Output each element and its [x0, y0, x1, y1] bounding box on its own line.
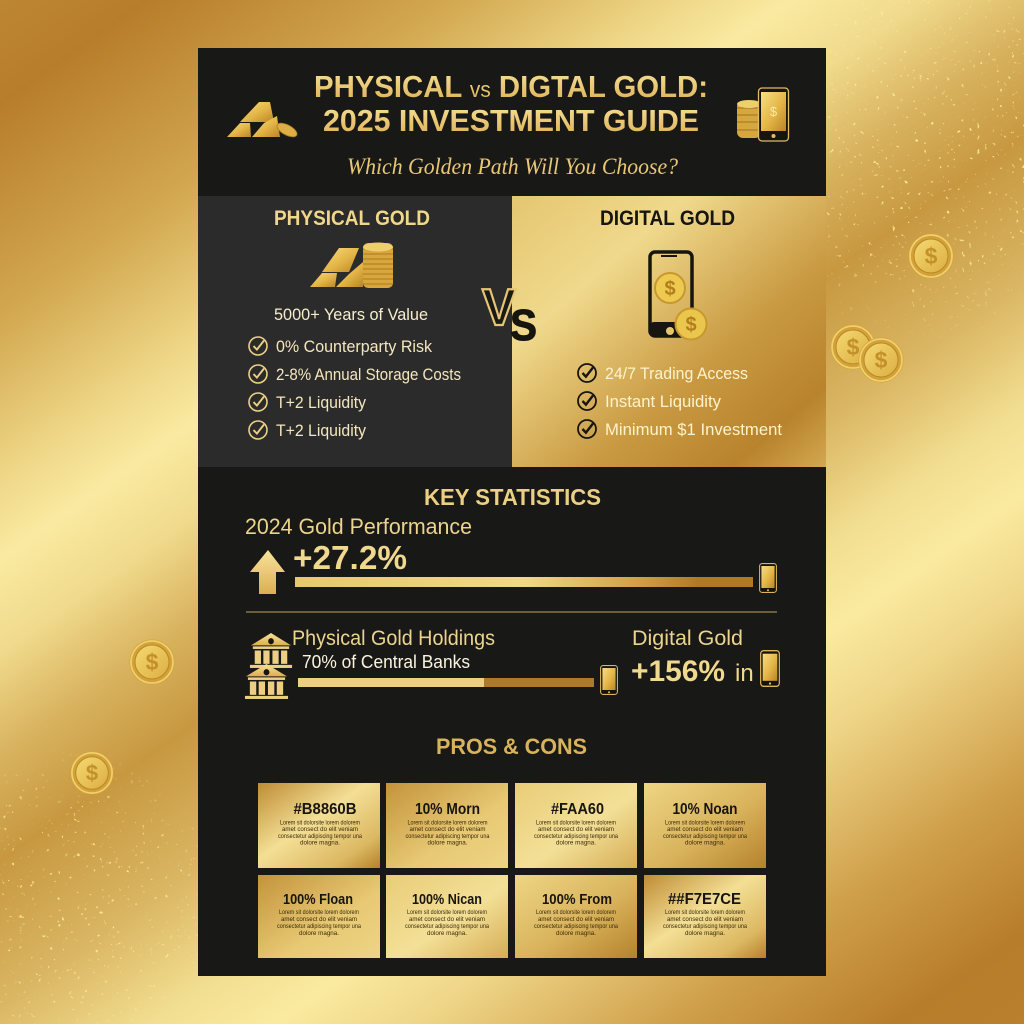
- check item 1: 0% Counterparty Risk: [276, 337, 432, 356]
- check item 1: 24/7 Trading Access: [605, 364, 748, 383]
- floating coin left upper: [130, 640, 174, 684]
- card 4: [644, 783, 766, 868]
- label: digital gold: Digital Gold: [632, 627, 743, 650]
- value: +27.2%: +27.2%: [293, 539, 407, 576]
- title block: [314, 69, 708, 179]
- holdings bar: [298, 678, 594, 687]
- card 6: Lorem sit dolorsite lorem dolorem: [407, 910, 487, 916]
- card 4: Lorem sit dolorsite lorem dolorem: [665, 820, 745, 826]
- heading: physical gold: PHYSICAL GOLD: [274, 207, 430, 230]
- gold dust top right: [826, 0, 1024, 350]
- card 3: [515, 783, 637, 868]
- card 7: consectetur adipiscing tempor una: [534, 924, 619, 930]
- value: +156%: +156%: [631, 655, 725, 688]
- gold dust bottom left: [0, 745, 198, 1024]
- VS badge: V: [482, 279, 516, 337]
- card 2: amet consect do elit veniam: [410, 827, 486, 833]
- card 2: [386, 783, 508, 868]
- card 5: dolore magna.: [299, 931, 339, 937]
- value: in: in: [735, 660, 754, 687]
- main dark panel: [198, 48, 826, 976]
- panel: physical gold: [198, 196, 512, 467]
- heading: pros and cons: PROS & CONS: [436, 734, 587, 759]
- card 6: [386, 875, 508, 958]
- heading: digital gold: DIGITAL GOLD: [600, 207, 735, 230]
- card 8: dolore magna.: [685, 931, 725, 937]
- card 5: amet consect do elit veniam: [281, 917, 357, 923]
- icon: gold bars and coin stack: [310, 242, 393, 288]
- check item 4: T+2 Liquidity: [276, 421, 366, 440]
- card 1: #B8860B: [294, 801, 356, 818]
- card 2: consectetur adipiscing tempor una: [406, 834, 490, 840]
- icon: bank buildings: [245, 633, 292, 699]
- floating coin left lower: [70, 751, 114, 795]
- icon: phone: [601, 666, 617, 694]
- card 8: amet consect do elit veniam: [667, 917, 743, 923]
- heading: key statistics: KEY STATISTICS: [424, 484, 601, 510]
- icon: gold bars header: [227, 102, 299, 140]
- check item 2: 2-8% Annual Storage Costs: [276, 365, 461, 384]
- title line 1: PHYSICAL vs DIGTAL GOLD:: [314, 69, 708, 104]
- card 2: 10% Morn: [415, 801, 480, 818]
- card 7: amet consect do elit veniam: [538, 917, 614, 923]
- floating coin right back: [830, 324, 876, 370]
- card 6: dolore magna.: [427, 931, 467, 937]
- card 5: Lorem sit dolorsite lorem dolorem: [279, 910, 359, 916]
- card 2: dolore magna.: [428, 840, 468, 846]
- section: key statistics: [245, 484, 779, 699]
- title line 2: 2025 INVESTMENT GUIDE: [323, 103, 699, 138]
- card 1: consectetur adipiscing tempor una: [278, 834, 363, 840]
- card 6: consectetur adipiscing tempor una: [405, 924, 490, 930]
- card 3: amet consect do elit veniam: [538, 827, 614, 833]
- label: 70% of central banks: 70% of Central Banks: [302, 652, 470, 672]
- card 6: amet consect do elit veniam: [409, 917, 485, 923]
- card 7: 100% From: [542, 891, 612, 908]
- icon: phone with coins: $: [664, 278, 676, 300]
- label: 2024 gold performance: 2024 Gold Performance: [245, 514, 472, 539]
- floating coin right front: [858, 338, 904, 382]
- card 3: #FAA60: [551, 801, 604, 818]
- card 4: 10% Noan: [672, 801, 738, 818]
- card 5: consectetur adipiscing tempor una: [277, 924, 362, 930]
- check item 3: Minimum $1 Investment: [605, 420, 782, 439]
- card 8: [644, 875, 766, 958]
- performance bar: [295, 577, 753, 587]
- panel: digital gold: [512, 196, 826, 467]
- card 7: Lorem sit dolorsite lorem dolorem: [536, 910, 616, 916]
- VS badge: [482, 279, 537, 350]
- card 4: dolore magna.: [685, 840, 725, 846]
- icon: coins and phone header: [737, 88, 788, 141]
- card 3: consectetur adipiscing tempor una: [534, 834, 619, 840]
- card 7: dolore magna.: [556, 931, 596, 937]
- card 4: amet consect do elit veniam: [667, 827, 743, 833]
- card 2: Lorem sit dolorsite lorem dolorem: [408, 820, 488, 826]
- icon: up arrow: [250, 550, 285, 594]
- stat: years of value: 5000+ Years of Value: [274, 305, 428, 324]
- check item 3: T+2 Liquidity: [276, 393, 366, 412]
- card 4: consectetur adipiscing tempor una: [663, 834, 748, 840]
- icon: phone: [760, 564, 776, 592]
- card 5: [258, 875, 380, 958]
- card 1: [258, 783, 380, 868]
- subtitle: Which Golden Path Will You Choose?: [347, 154, 678, 179]
- card 8: Lorem sit dolorsite lorem dolorem: [665, 910, 745, 916]
- card 5: 100% Floan: [283, 891, 353, 908]
- card 8: consectetur adipiscing tempor una: [663, 924, 748, 930]
- card 6: 100% Nican: [412, 891, 482, 908]
- label: physical gold holdings: Physical Gold Holdings: [292, 627, 495, 650]
- icon: coins and phone header: $: [770, 104, 778, 119]
- card 8: ##F7E7CE: [668, 891, 741, 908]
- icon: phone with coins: [650, 252, 706, 340]
- VS badge: S: [510, 301, 537, 350]
- card 1: amet consect do elit veniam: [282, 827, 358, 833]
- icon: phone with coins: $: [685, 314, 697, 336]
- card 1: Lorem sit dolorsite lorem dolorem: [280, 820, 360, 826]
- floating coin right top: [908, 234, 954, 278]
- check item 2: Instant Liquidity: [605, 392, 721, 411]
- card 3: dolore magna.: [556, 840, 596, 846]
- icon: phone large: [761, 651, 779, 686]
- card 7: [515, 875, 637, 958]
- card 3: Lorem sit dolorsite lorem dolorem: [536, 820, 616, 826]
- card 1: dolore magna.: [300, 840, 340, 846]
